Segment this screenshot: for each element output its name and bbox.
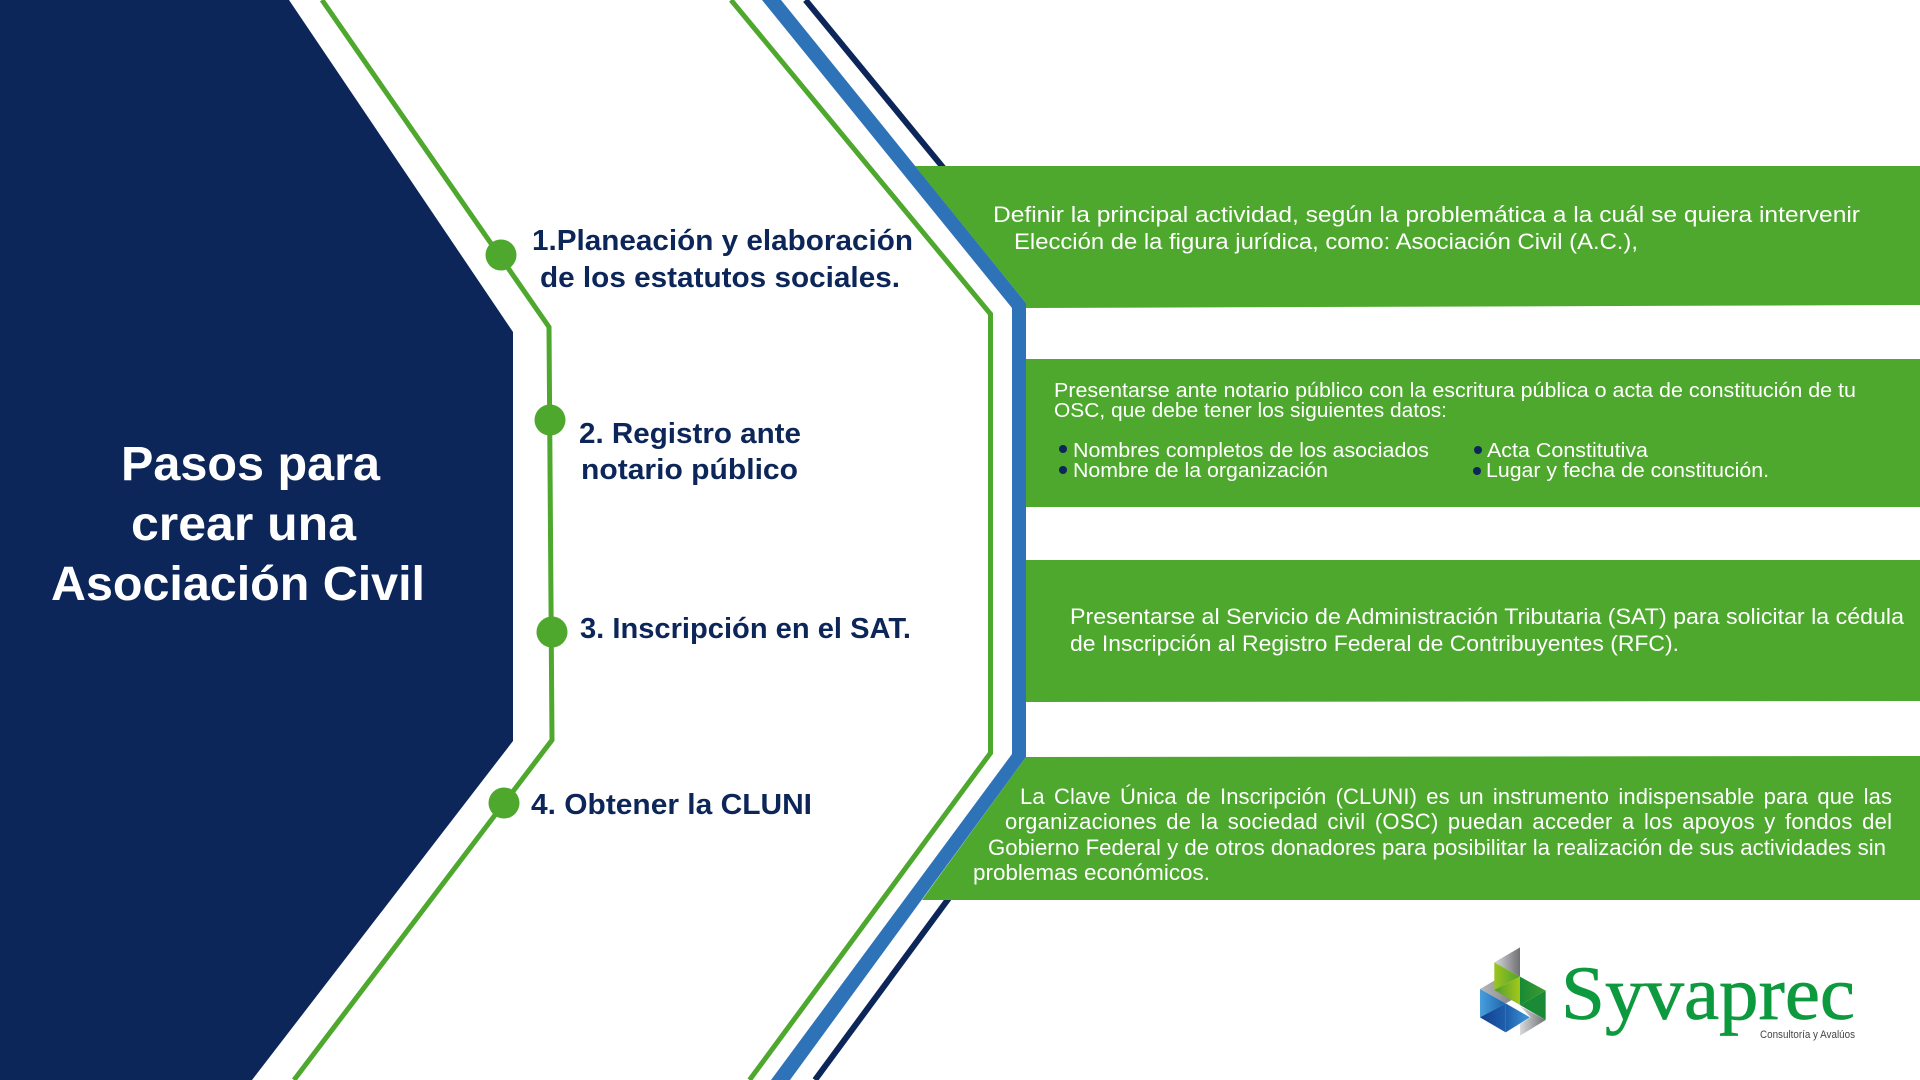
panel: step 4 description: Gobierno Federal y de otros donadores para posibilitar la realización de sus actividades sin <box>988 835 1886 860</box>
step 1: dot and label <box>486 225 913 294</box>
decorative line: navy bottom <box>815 898 949 1080</box>
panel: step 4 description: La Clave Única de Inscripción (CLUNI) es un instrumento indispensable para que las <box>1020 784 1892 809</box>
step 2: dot and label: notario público <box>581 454 798 486</box>
timeline line: right green <box>731 0 990 1080</box>
step 4: dot and label: 4. Obtener la CLUNI <box>531 789 812 821</box>
title: Asociación Civil <box>51 558 425 611</box>
band: blue chevron <box>762 0 1026 1080</box>
panel: navy title hexagon <box>0 0 513 1080</box>
step 3: dot and label: 3. Inscripción en el SAT. <box>580 613 911 645</box>
panel: step 3 description: Presentarse al Servicio de Administración Tributaria (SAT) para solicitar la cédula <box>1070 604 1905 629</box>
panel: step 4 description: problemas económicos. <box>973 860 1210 885</box>
panel: step 2 description: Nombres completos de los asociados <box>1073 439 1429 462</box>
title: Pasos para <box>121 438 380 491</box>
icon: cube mark <box>1480 947 1546 1036</box>
title: crear una <box>131 498 356 551</box>
panel: step 4 description: organizaciones de la sociedad civil (OSC) puedan acceder a los apoyos y fondos del <box>1005 809 1892 834</box>
panel: step 1 description: Definir la principal actividad, según la problemática a la cuál se quiera intervenir <box>993 202 1860 227</box>
decorative line: navy top <box>806 0 944 168</box>
title <box>51 438 425 611</box>
panel: step 2 description: Lugar y fecha de constitución. <box>1486 459 1769 482</box>
panel: step 2 description: Acta Constitutiva <box>1487 439 1649 462</box>
panel: step 1 description <box>915 166 1920 308</box>
panel: step 3 description <box>1026 560 1920 702</box>
panel: step 2 description: Nombre de la organización <box>1073 459 1328 482</box>
step 1: dot and label: 1.Planeación y elaboración <box>532 225 913 257</box>
timeline line: left green <box>294 0 552 1080</box>
step 2: dot and label <box>534 404 801 486</box>
panel: step 2 description: Presentarse ante notario público con la escritura pública o acta de constitución de tu <box>1054 379 1856 402</box>
logo: Syvaprec <box>1480 947 1855 1041</box>
panel: step 2 description <box>1026 359 1920 507</box>
panel: step 2 description: OSC, que debe tener los siguientes datos: <box>1054 399 1447 422</box>
panel: step 1 description: Elección de la figura jurídica, como: Asociación Civil (A.C.), <box>1014 229 1638 254</box>
panel: step 3 description: de Inscripción al Registro Federal de Contribuyentes (RFC). <box>1070 631 1679 656</box>
step 2: dot and label: 2. Registro ante <box>579 418 801 450</box>
panel: step 4 description <box>922 756 1920 900</box>
logo tagline: Consultoría y Avalúos <box>1760 1029 1855 1041</box>
step 1: dot and label: de los estatutos sociales. <box>540 262 900 294</box>
logo wordmark: Syvaprec <box>1561 952 1855 1036</box>
